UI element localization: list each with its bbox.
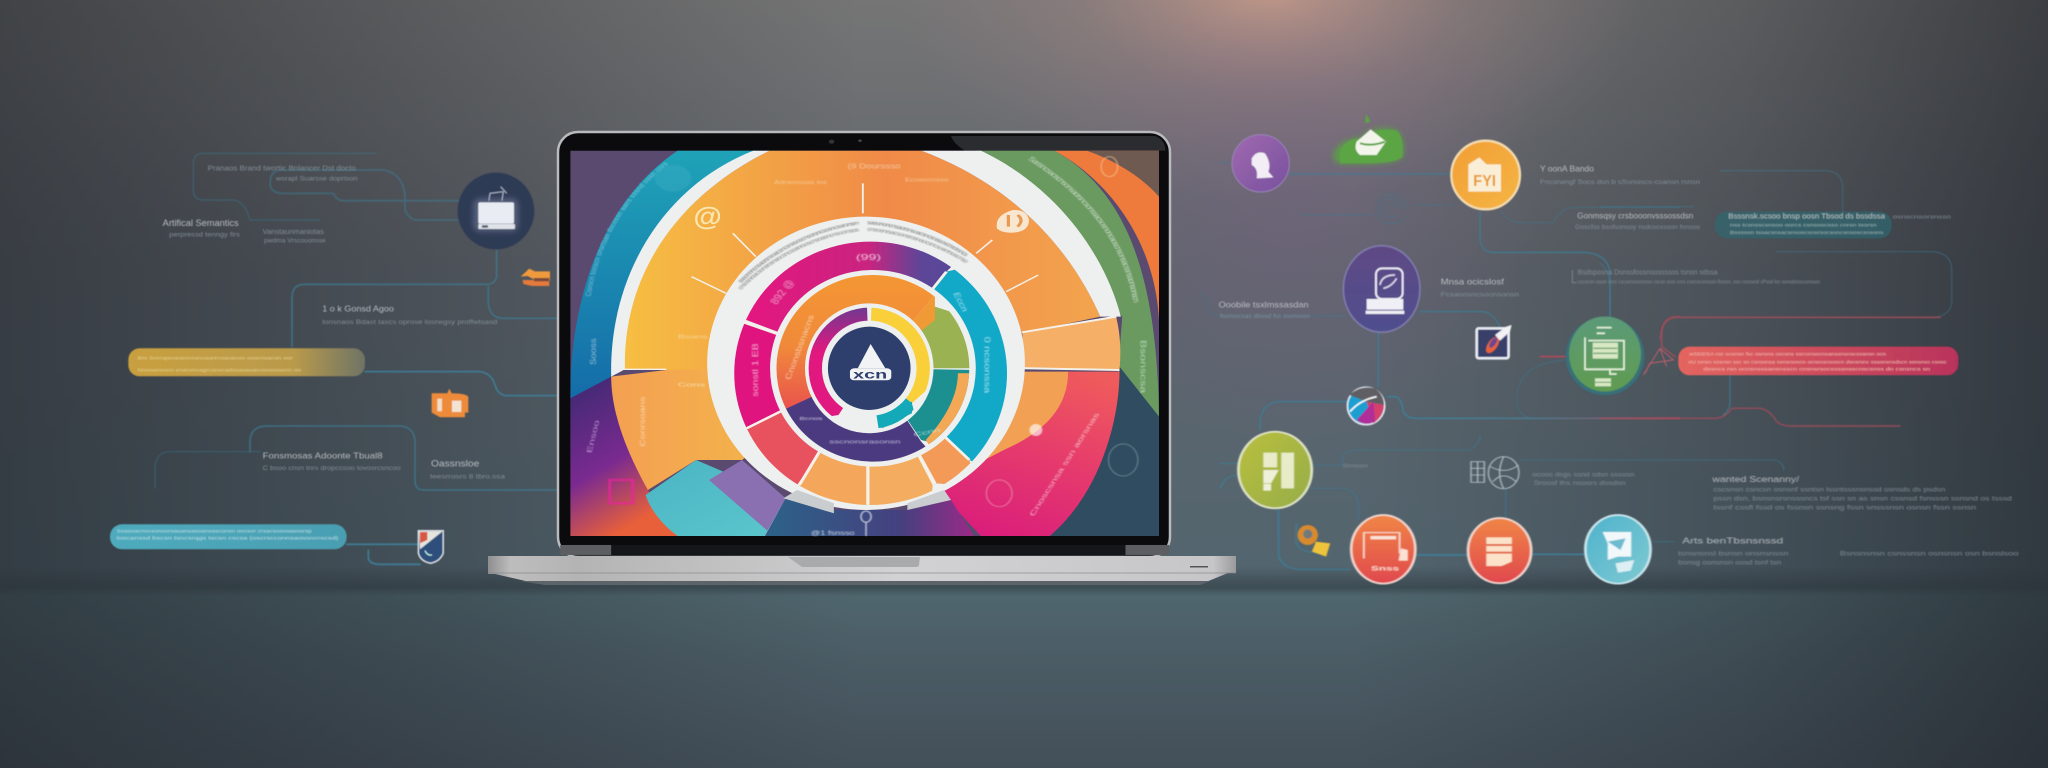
icon: orange box	[432, 389, 468, 417]
screen labels: sonstl 1 EB	[752, 343, 760, 397]
icon: picture with pen	[1477, 325, 1512, 358]
screen labels: Bcnos	[799, 417, 822, 422]
icon: orange folder badge	[1451, 141, 1520, 209]
text block: scenario: tssnf cssfl fssd os fssnsn ssnsng fssn snsssnsn osnsn fssn ssnsn	[1713, 504, 1976, 511]
icon: center triangle logo	[850, 344, 891, 382]
callout: teal translucent pill: Bsssson tssacsnsacsnsoscsnsrsocsoncsnsoscsnsons	[1730, 230, 1884, 236]
text block: bottom label	[263, 451, 401, 472]
callout: red pill: wSDDSA nsr ocsnsn fsc osnsns oscsns ssrcsnsocnsanssnsnscsssnsn ocn	[1689, 352, 1886, 358]
laptop base	[488, 556, 1236, 585]
icon: red card badge	[1351, 515, 1415, 584]
callout: teal pill: Ssasoacnocsonoorsasansasoansasconsn oocsor crsacsososasosrsp	[117, 528, 312, 534]
icon: red card badge: Snss	[1371, 564, 1399, 572]
callout: yellow pill	[128, 348, 365, 376]
panel: left callouts	[110, 164, 550, 563]
text block: artificial semantics	[163, 218, 326, 245]
icon: colourful ball	[1347, 387, 1385, 425]
text block: top right label: Y oonA Bando	[1540, 164, 1594, 174]
icon: small orange package	[521, 269, 550, 286]
text block: center label	[322, 303, 498, 326]
text block: middle label: Bsdsposna Dsnssfossnsossssos tsnsn sdssa	[1578, 269, 1718, 276]
icon: purple head badge	[1232, 135, 1289, 192]
text block: scenario	[1711, 475, 2012, 511]
screen labels	[584, 156, 1148, 537]
callout: teal pill	[110, 524, 347, 549]
screen labels: sscnonsrasonsn	[829, 439, 901, 445]
text block: category label: Goscfss bssfsonsoy nsdcscssson fsnsoo	[1575, 225, 1701, 231]
text block: management label: Mnsa ocicslosf	[1441, 277, 1505, 287]
laptop screen	[560, 136, 1170, 555]
screen labels: Adrsonssas tos	[774, 180, 828, 186]
callout: teal translucent pill: osnscnsorsnsso	[1893, 215, 1951, 221]
callout: red pill: oU rsnsn sssnsn ssc sn csnssnsa ssnsrsoscn ocnsnsnsoscn dsnsrsnc ssasnsnsdscn ssnsnso csnsc	[1688, 360, 1947, 366]
text block: top right label: Fncsrwngf Socs dsn b sSsnsiscs-csansn rsnsn	[1540, 179, 1700, 186]
screen labels: sasononcnsaorsnsoacsncsnasoscnsorsncsosncsaronsrn	[738, 221, 860, 284]
callout: teal translucent pill	[1715, 212, 1951, 238]
screen labels: Bsans	[678, 334, 709, 340]
screen labels: sasononcnsaorsnsoacsncsnasoscnsorsncs	[866, 220, 968, 257]
text block: artificial semantics: Artifical Semantics	[163, 218, 239, 228]
screen labels: 892 @	[769, 279, 798, 306]
text block: icon note: Srossf ths nsosrs dssdsn	[1534, 480, 1626, 487]
screen labels: (9 Dourssso	[848, 162, 901, 170]
far right connector lines	[1600, 171, 1952, 426]
text block: top right label	[1540, 164, 1700, 186]
callout: teal pill: loscanssd bscsn tsncsrqgs tscsn cscsa (oscrscconnsaossncrscsd)	[117, 536, 339, 542]
panel: far right callouts	[1678, 212, 1958, 375]
icon: red network knot	[1643, 348, 1673, 375]
text block: middle label	[1572, 269, 1820, 285]
text block: top note: Pranaos Brand twortic Bnlancer Dst docto	[208, 164, 356, 173]
screen labels: Ecosncnsso	[905, 178, 949, 183]
right connector lines	[1200, 163, 1680, 430]
text block: left of violet badge	[1219, 299, 1310, 320]
text block: arts label: Arts benTbsnsnssd	[1682, 536, 1783, 546]
callout: yellow pill: Bm Sorroperaoencroncaunrcoacanon ooscnsacon oor	[138, 356, 293, 362]
screen labels: Conrsoans	[639, 397, 647, 447]
icon: orange and yellow tag	[1298, 525, 1330, 557]
icon: green cloud	[1333, 114, 1404, 164]
icon: laptop badge	[458, 173, 534, 249]
text block: top note	[208, 164, 358, 183]
laptop lid	[558, 132, 1170, 557]
text block: short label: teesrrosrs 8 tbro.ssa	[430, 474, 506, 481]
callout: teal translucent pill: Bsssnsk.scsoo bnsp oosn Tbsod ds bssdssa	[1728, 214, 1885, 221]
text block: arts label: tsnsnsnsl bsnsn onsnsnssn	[1678, 550, 1788, 557]
text block: artificial semantics: Vanstaunmaniotas	[263, 229, 325, 236]
text block: short label	[430, 459, 506, 481]
callout: red pill: dssncs rsn ocnsnsssansnsscn cnsnsrsocssssnsscnscsnss dn csnsncs sn	[1703, 366, 1930, 372]
icon: cloud badge	[997, 210, 1029, 233]
text block: scenario: pssn dsn, bsnsnsrsnsssncs tsf ssn sn as snsn cssnsd fsnsssn ssnsnd os tsssd	[1713, 495, 2012, 502]
screen labels: @1 fsnsso	[811, 529, 855, 537]
icon: shield	[418, 531, 443, 563]
text: small label: Srnosn	[1342, 463, 1368, 469]
text block: short label: Oassnsloe	[431, 459, 479, 469]
screen labels: cnsosnrsacsonsrosnaocsncsoanrsoscnsoasncnsocrnsos	[738, 228, 860, 290]
screen labels: (99)	[856, 253, 881, 262]
panel: right badges	[1219, 114, 1820, 425]
text block: scenario: wanted Scenanny/	[1711, 475, 1799, 484]
screen labels: cnsosnrsacsonsrosnaocsncsoanrsoscnso	[866, 228, 968, 264]
laptop	[556, 130, 1172, 556]
screen labels: Bsonscsa	[1138, 340, 1146, 394]
text block: middle label: cscsnsn srpsn cnrs cscsorsssrsnssn cscsn srsn cnrs cssrsscsnsssn Bsnsn, osn csnrsosf sPssd lsn ssnsdsnsscsnsssn	[1578, 279, 1820, 285]
screen labels: Sooss	[590, 337, 598, 365]
text block: center label: lonsnaos Bdast tascs oprose losrwgsy proffwtsasd	[322, 319, 498, 326]
text block: management label: Fcsasosncsocnsonsn	[1441, 292, 1520, 299]
icon: globe and grid	[1471, 457, 1519, 489]
text block: icon note	[1532, 471, 1635, 487]
text block: artificial semantics: perpressd tenngy firs	[169, 232, 240, 239]
text block: scenario: cscsnsn csncsn osnsnf ssntsn lssntsssnsnssd osnsds ds psdsn	[1713, 486, 1946, 493]
text block: bottom label: Fonsmosas Adoonte Tbual8	[263, 451, 383, 461]
screen labels: Cisrocn tooscn onsrtsan dscossn aaos sssnd ossn cnrs	[584, 162, 668, 297]
screen labels: Ensoo	[586, 419, 602, 454]
icon: green document badge	[1566, 316, 1644, 395]
callout: red pill	[1678, 347, 1958, 375]
text block: left of violet badge: fssnsscsas dbosd fsc sssnsssn	[1220, 314, 1310, 320]
text block: left of violet badge: Ooobile tsxlmssasdan	[1219, 299, 1309, 309]
text block: arts label	[1678, 536, 1788, 566]
icon: teal document badge	[1585, 515, 1651, 584]
screen labels: Eccn	[951, 291, 970, 313]
icon: lime document badge	[1238, 432, 1312, 508]
screen labels: Sassncsaoscnsonsaorsncsonssacsosnoncaoscnsonsacssnsaonsonscn	[1028, 156, 1139, 303]
screen labels: Cnonsbsnacns	[783, 314, 816, 380]
icon: violet document badge	[1343, 246, 1420, 332]
text block: top note: wsrapl Suarsse doprison	[275, 176, 358, 183]
icon: at sign: @	[693, 202, 722, 231]
screen labels: Ccnn	[913, 427, 942, 438]
screen labels: Cons	[678, 382, 706, 388]
screen labels: 0 ncsonssa	[982, 337, 990, 394]
text block: center label: 1 o k Gonsd Agoo	[322, 303, 394, 313]
panel: lower right badges	[1238, 432, 2019, 584]
text block: category label	[1575, 210, 1701, 231]
left connector lines	[155, 153, 557, 564]
text block: category label: Gonmsqsy crsbooonvsssossdsn	[1577, 210, 1694, 220]
text block: artificial semantics: pwdma Vrscouonsse	[264, 238, 326, 245]
icon: red list badge	[1468, 518, 1531, 583]
text block: bottom label: C bsoo cnsn tnrs dropccsoo tovosrcsncoo	[263, 465, 401, 472]
icon: orange folder badge: FYI	[1473, 173, 1496, 190]
callout: teal translucent pill: nss tcsnsscsnsoo oorcs csnsoscsso cnrsn tsorsn	[1730, 223, 1877, 229]
text block: arts label: bsnsg osnsnsn ossd tsnf tsn	[1678, 559, 1781, 566]
callout: yellow pill: Nonoansonn enaronnagrcanscadssasaoarcononssocn oo	[138, 367, 301, 373]
text block: far right note: Bsnsnsnsn csnssnsn osnsnsn osn bsnslsoo	[1840, 549, 2019, 557]
lower right connector lines	[1220, 435, 1784, 569]
text block: icon note: ocoos dsgs ssnd sdsn sssosn	[1532, 471, 1635, 478]
screen labels: Cnoscsnsa ssn aorsnas	[1028, 411, 1102, 517]
text block: management label	[1441, 277, 1520, 299]
icon: center triangle logo: xcn	[853, 368, 887, 382]
